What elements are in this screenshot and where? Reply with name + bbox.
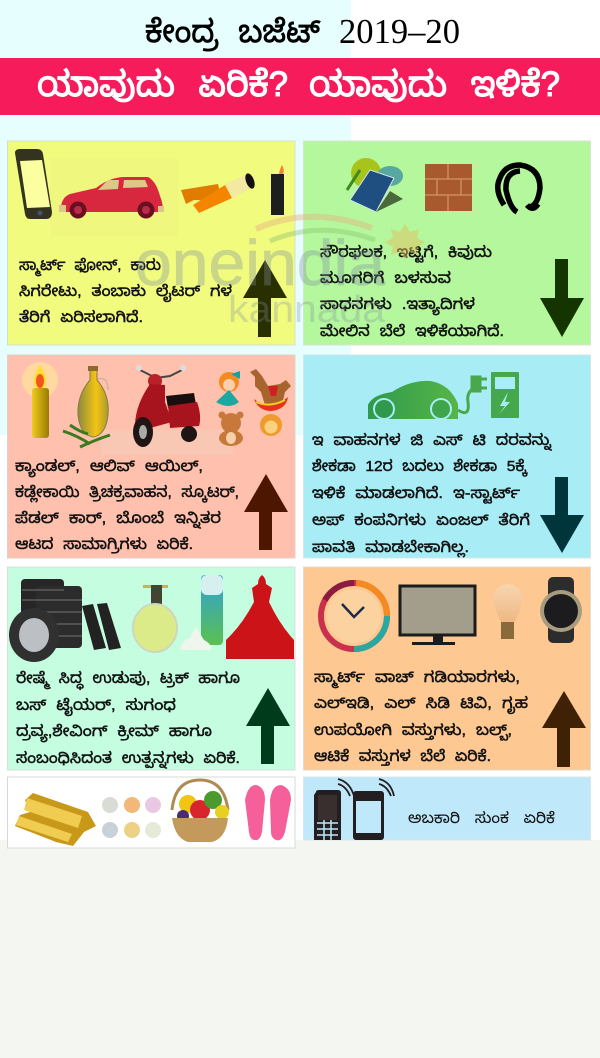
icon: pearls — [102, 797, 161, 838]
icon: hearing aid — [498, 165, 540, 212]
text: panel 2 — [320, 244, 504, 340]
text: panel 6: ಎಲ್ಇಡಿ, ಎಲ್ ಸಿಡಿ ಟಿವಿ, ಗೃಹ — [314, 695, 528, 715]
text: panel 4: ಅಪ್ ಕಂಪನಿಗಳು ಏಂಜಲ್ ತೆರಿಗೆ — [312, 512, 530, 529]
text: panel 3 — [15, 458, 239, 554]
arrow: down — [540, 259, 584, 337]
text: panel 8: ಅಬಕಾರಿ ಸುಂಕ ಏರಿಕೆ — [408, 810, 555, 827]
panel: phone car cigarette lighter up — [8, 141, 295, 345]
text: panel 3: ಕಡ್ಲೇಕಾಯಿ ತ್ರಿಚಕ್ರವಾಹನ, ಸ್ಕೂಟರ್, — [15, 484, 239, 503]
watermark: oneindia kannada: oneindia — [135, 227, 385, 299]
icon: lighter — [271, 165, 284, 215]
arrow: up — [542, 691, 586, 767]
icon: cigarette — [181, 172, 256, 213]
panel: solar brick hearing aid down — [304, 141, 590, 345]
banner: ಯಾವುದು ಇಳಿಕೆ? — [309, 65, 560, 104]
text: panel 2: ಮೂಗರಿಗೆ ಬಳಸುವ — [320, 270, 451, 287]
text: panel 3: ಪೆಡಲ್ ಕಾರ್, ಬೊಂಬೆ ಇನ್ನಿತರ — [15, 510, 221, 529]
panel: electric vehicle down — [304, 355, 590, 558]
icon: brick wall — [425, 164, 472, 211]
icon: electric car and charger — [368, 372, 519, 420]
icon: solar panel — [347, 158, 403, 212]
text: panel 1: ಸ್ಮಾರ್ಟ್ ಫೋನ್, ಕಾರು — [19, 257, 161, 277]
text: panel 2: ಸಾಧನಗಳು .ಇತ್ಯಾದಿಗಳ — [320, 296, 475, 316]
text: panel 5: ದ್ರವ್ಯ,ಶೇವಿಂಗ್ ಕ್ರೀಮ್ ಹಾಗೂ — [16, 723, 212, 743]
title: ಕೇಂದ್ರ ಬಜೆಟ್ — [145, 14, 321, 52]
icon: scooter — [133, 365, 200, 447]
text: panel 6: ಸ್ಮಾರ್ಟ್ ವಾಚ್ ಗಡಿಯಾರಗಳು, — [314, 669, 520, 689]
icon: candle — [22, 362, 58, 438]
icon: perfume — [133, 585, 177, 652]
text: panel 4 — [312, 432, 553, 558]
icon: shaving cream — [180, 575, 223, 650]
text: panel 5: ಸಂಬಂಧಿಸಿದಂತ ಉತ್ಪನ್ನಗಳು ಏರಿಕೆ. — [16, 750, 240, 769]
icon: mobile phones — [314, 779, 394, 840]
text: panel 1 — [19, 257, 232, 326]
icon: tyres — [9, 579, 121, 662]
arrow: down — [540, 477, 584, 553]
banner — [0, 58, 600, 115]
text: panel 4: ಇ ವಾಹನಗಳ ಜಿ ಎಸ್ ಟಿ ದರವನ್ನು — [312, 432, 553, 451]
icon: smart watch — [540, 577, 582, 643]
text: panel 3: ಆಟದ ಸಾಮಾಗ್ರಿಗಳು ಏರಿಕೆ. — [15, 536, 193, 554]
panel: candle oil scooter toys up — [8, 355, 295, 558]
icon: clock — [321, 583, 387, 649]
icon: flip flops — [245, 785, 291, 840]
banner: ಯಾವುದು ಏರಿಕೆ? — [37, 65, 288, 104]
text: panel 5 — [16, 670, 240, 769]
icon: television — [400, 586, 475, 645]
icon: red dress — [226, 575, 294, 659]
title — [145, 12, 460, 52]
panel: tyres perfume dress up — [8, 567, 295, 770]
text: panel 1: ಸಿಗರೇಟು, ತಂಬಾಕು ಲೈಟರ್ ಗಳ — [19, 283, 232, 303]
text: panel 5: ರೇಷ್ಮೆ ಸಿದ್ಧ ಉಡುಪು, ಟ್ರಕ್ ಹಾಗೂ — [16, 670, 240, 690]
text: panel 1: ತೆರಿಗೆ ಏರಿಸಲಾಗಿದೆ. — [19, 309, 143, 326]
icon: fruit basket — [172, 780, 229, 842]
text: panel 2: ಸೌರಫಲಕ, ಇಟ್ಟಿಗೆ, ಕಿವುದು — [320, 244, 492, 263]
text: panel 4: ಪಾವತಿ ಮಾಡಬೇಕಾಗಿಲ್ಲ. — [312, 539, 469, 558]
text: panel 5: ಬಸ್ ಟೈಯರ್, ಸುಗಂಧ — [16, 697, 176, 717]
arrow: up — [243, 260, 287, 337]
icon: olive oil — [63, 366, 110, 447]
text: panel 3: ಕ್ಯಾಂಡಲ್, ಆಲಿವ್ ಆಯಿಲ್, — [15, 458, 203, 478]
arrow: up — [246, 688, 290, 764]
icon: gold bars — [15, 793, 96, 846]
icon: red car — [59, 177, 164, 218]
text: panel 6: ಆಟಿಕೆ ವಸ್ತುಗಳ ಬೆಲೆ ಏರಿಕೆ. — [314, 748, 491, 766]
text: panel 6: ಉಪಯೋಗಿ ವಸ್ತುಗಳು, ಬಲ್ಬ್, — [314, 722, 512, 741]
panel: watch tv bulb up — [304, 567, 590, 770]
watermark: oneindia kannada: kannada — [228, 289, 386, 331]
watermark: oneindia kannada — [135, 217, 425, 331]
text: panel 6 — [314, 669, 528, 766]
panel: gold pearls fruit slippers — [8, 777, 295, 848]
icon: light bulb — [493, 584, 522, 639]
icon: smartphone — [15, 149, 52, 219]
text: panel 4: ಇಳಿಕೆ ಮಾಡಲಾಗಿದೆ. ಇ-ಸ್ಟಾರ್ಟ್ — [312, 485, 521, 504]
panel: mobile phones excise — [304, 777, 590, 840]
arrow: up — [244, 474, 288, 550]
title: 2019–20 — [339, 12, 460, 51]
text: panel 4: ಶೇಕಡಾ 12ರ ಬದಲು ಶೇಕಡಾ 5ಕ್ಕೆ — [312, 458, 528, 477]
icon: toys — [216, 369, 291, 446]
text: panel 2: ಮೇಲಿನ ಬೆಲೆ ಇಳಿಕೆಯಾಗಿದೆ. — [320, 323, 504, 340]
